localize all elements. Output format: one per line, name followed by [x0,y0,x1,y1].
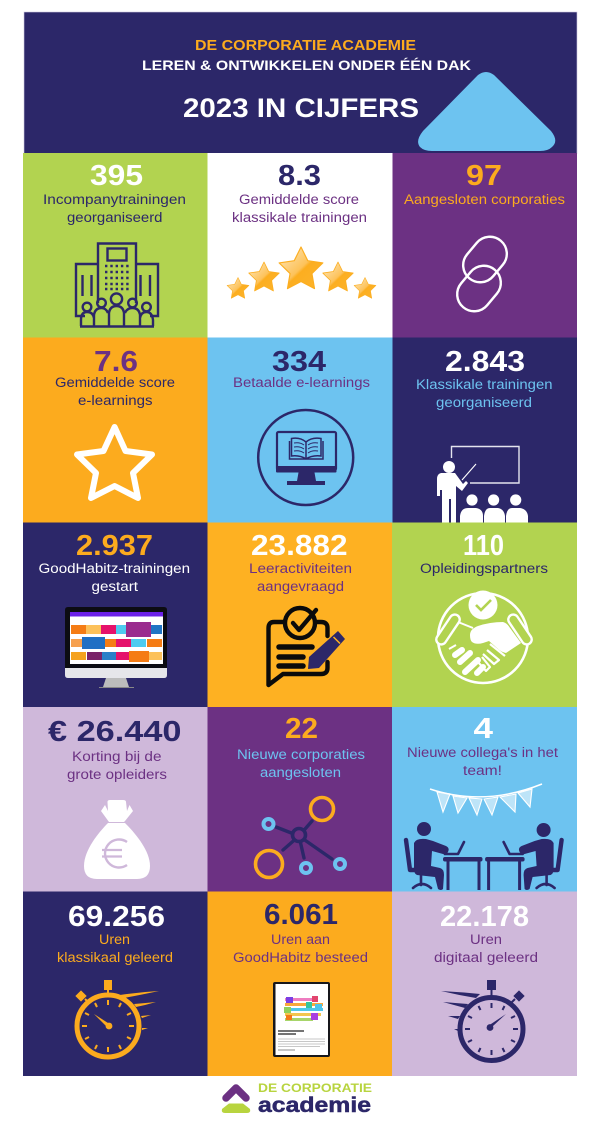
panel: paid e-learnings [208,338,392,522]
icon: colleagues at desks [406,822,562,890]
label: Klassikale trainingen [416,377,552,392]
label [249,561,352,594]
label: aangesloten [260,765,341,780]
label [43,192,186,225]
number: 22 [285,713,318,745]
number: 334 [272,346,326,378]
number: 4 [474,713,493,745]
header: tagline: LEREN & ONTWIKKELEN ONDER ÉÉN DAK [142,57,471,73]
icon: outline star [77,427,152,498]
icon: network [256,798,345,878]
label: klassikaal geleerd [57,950,173,965]
number: 97 [466,160,502,192]
label: Nieuwe collega's in het [407,745,558,760]
label: Gemiddelde score [55,375,175,390]
left colleague and desk [406,822,482,890]
panel: discount [23,707,208,892]
label: Nieuwe corporaties [237,747,365,762]
icon: building with people [76,244,158,326]
number: 23.882 [251,530,348,562]
icon: teacher and students [437,446,528,523]
icon: money bag [84,800,150,879]
number: 395 [90,160,143,192]
icon: roof [418,72,555,151]
label: grote opleiders [67,767,167,782]
label: Uren aan [271,932,330,947]
panel: score e-learnings [23,338,208,522]
label: digitaal geleerd [434,950,538,965]
panel: score classroom trainings [208,153,392,338]
number: 69.256 [68,901,165,933]
label [434,932,538,965]
label: aangevraagd [257,579,344,594]
icon: stopwatch [441,980,525,1060]
icon: monitor with book [258,410,353,505]
label [57,932,173,965]
label: georganiseerd [436,395,532,410]
number: 8.3 [278,160,321,192]
number: 7.6 [94,346,138,378]
number: 110 [463,530,504,562]
logo wordmark top: DE CORPORATIE [258,1081,372,1095]
label: gestart [92,579,138,594]
panel: digital hours [392,892,577,1076]
label: Leeractiviteiten [249,561,352,576]
icon: five stars [227,247,376,298]
label [237,747,365,780]
label [407,745,558,778]
logo wordmark bottom: academie [258,1094,371,1117]
right colleague and desk [485,823,562,890]
panel: new colleagues [392,707,577,892]
label: e-learnings [78,393,153,408]
label [67,749,167,782]
label: team! [463,763,502,778]
header: organisation name: DE CORPORATIE ACADEMIE [195,38,416,54]
panel: GoodHabitz trainings started [23,522,208,707]
label: Uren [470,932,502,947]
label: GoodHabitz-trainingen [38,561,190,576]
icon: clipboard with pencil [268,608,345,685]
panel: connected corporations [392,153,577,338]
label [416,377,552,410]
icon: bunting [430,784,542,815]
label [232,192,367,225]
panel: GoodHabitz hours [208,892,392,1076]
icon: tablet with course page [273,982,330,1057]
label: Uren [99,932,130,947]
number: 2.843 [445,346,525,378]
title: 2023 IN CIJFERS [183,93,419,123]
label: Aangesloten corporaties [404,192,565,207]
label: klassikale trainingen [232,210,367,225]
logo: De Corporatie Academie [222,1081,372,1117]
label: Gemiddelde score [239,192,359,207]
label [55,375,175,408]
label [233,932,368,965]
logo mark: roof and base [222,1088,250,1113]
number: 6.061 [264,899,338,931]
panel: incompany trainings [23,153,208,338]
panel: training partners [392,522,577,707]
icon: chain links [450,230,514,318]
number: € 26.440 [48,716,182,748]
number: 22.178 [440,901,529,933]
panel: header [24,12,577,154]
label: Incompanytrainingen [43,192,186,207]
number: 2.937 [76,530,153,562]
label: Betaalde e-learnings [233,375,370,390]
icon: handshake with check badge [434,590,534,683]
label: georganiseerd [67,210,162,225]
label: Korting bij de [72,749,162,764]
panel: classroom hours [23,892,208,1076]
panel: learning activities requested [208,522,392,707]
label: GoodHabitz besteed [233,950,368,965]
icon: desktop computer with course catalogue [65,607,167,688]
label [38,561,190,594]
panel: classroom trainings organised [392,338,577,523]
icon: stopwatch [75,980,159,1057]
panel: new corporations [208,707,392,892]
label: Opleidingspartners [420,561,548,576]
